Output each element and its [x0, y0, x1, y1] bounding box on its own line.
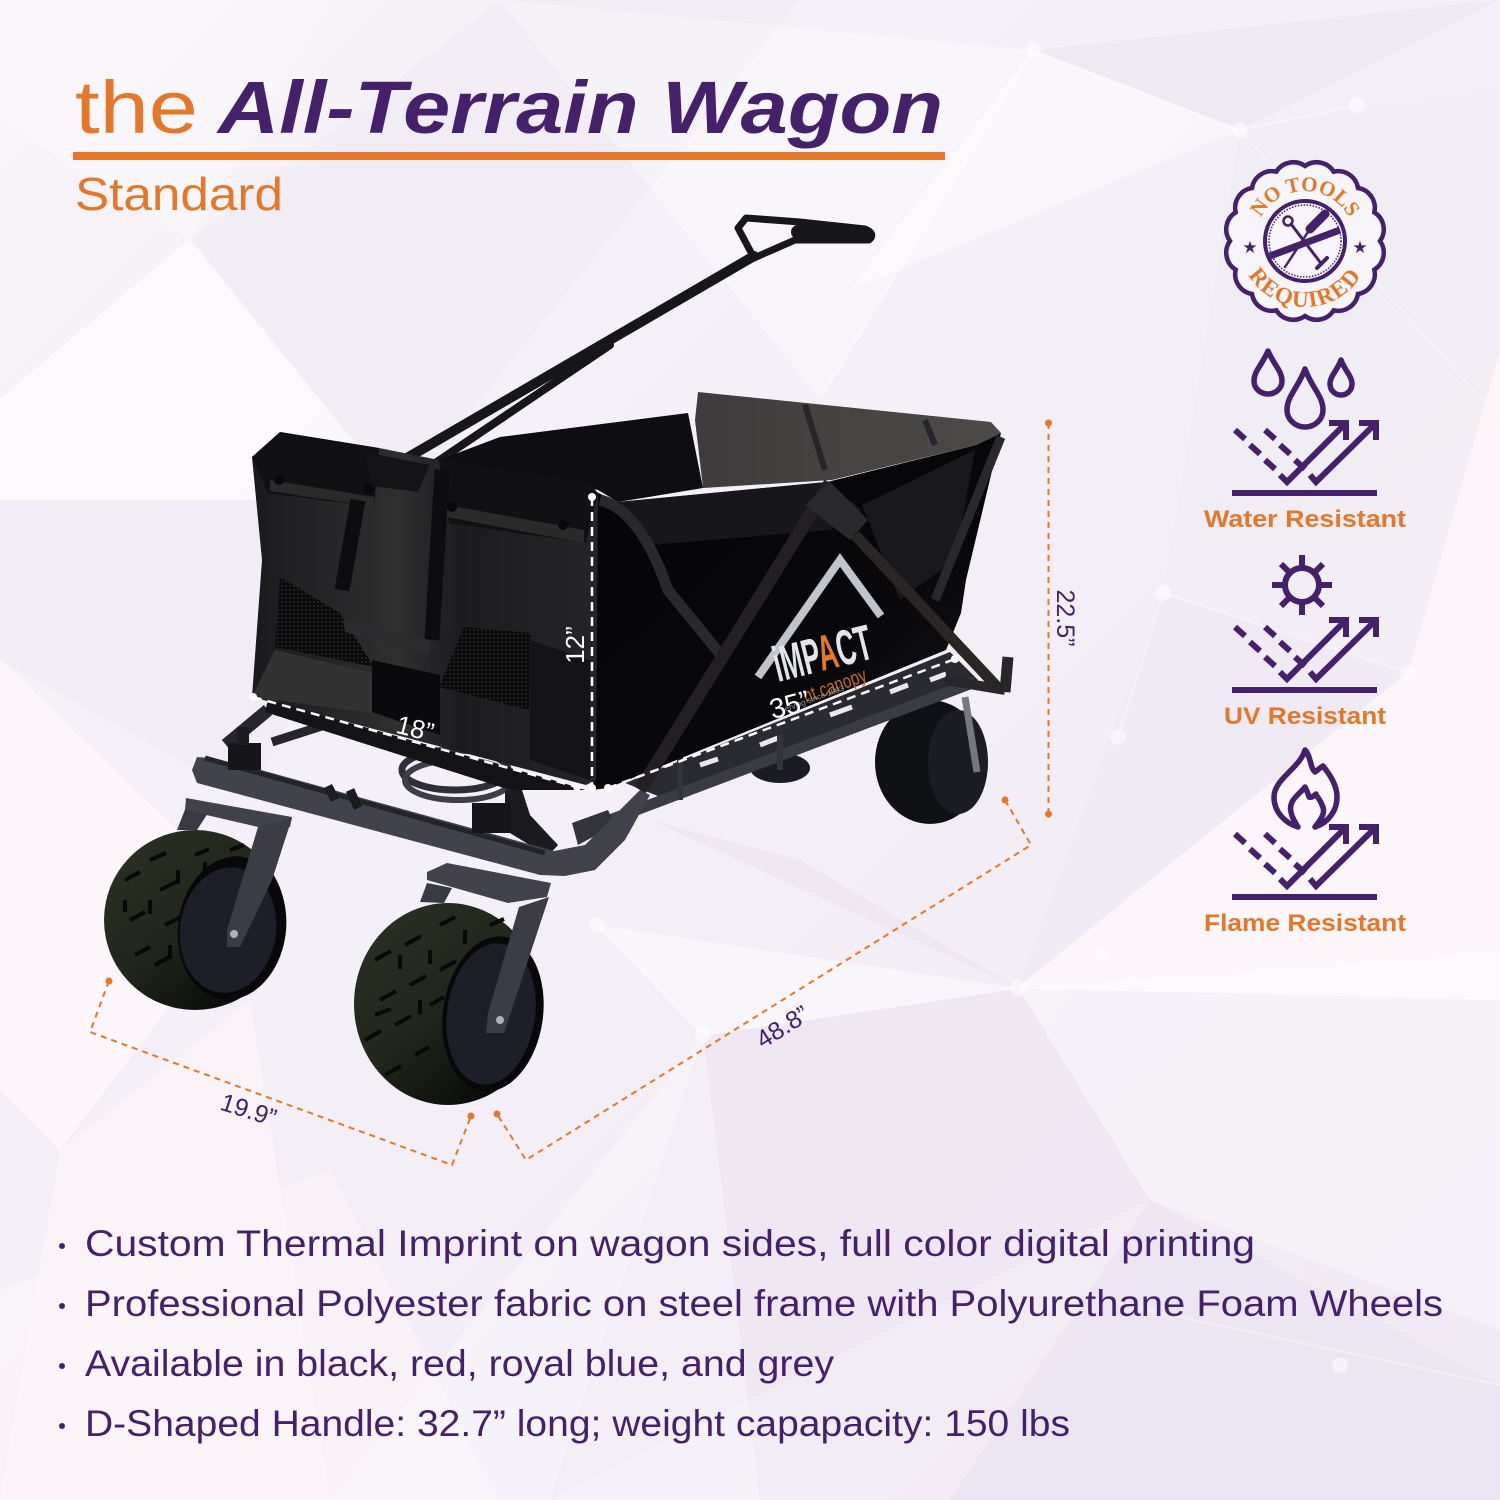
- badge: no tools required: ★: [1242, 238, 1258, 257]
- dimension: 22.5 inch height: 22.5”: [1051, 590, 1079, 646]
- dimension: 35 inch: 35”: [766, 685, 813, 725]
- wagon: right front wheel: [354, 863, 553, 1105]
- dimension: 12 inch: 12”: [560, 626, 590, 664]
- dimension: 19.9 inch width: 19.9”: [217, 1088, 280, 1133]
- wagon: under-bed frame: [226, 652, 1008, 856]
- feature list: Custom Thermal Imprint on wagon sides, full color digital printing: [85, 1223, 1255, 1264]
- title: [73, 66, 945, 160]
- feature list: D-Shaped Handle: 32.7” long; weight capapacity: 150 lbs: [85, 1403, 1070, 1444]
- wagon: interior: [439, 413, 703, 502]
- dimension: 12 inch: [560, 493, 596, 792]
- feature list: Available in black, red, royal blue, and grey: [85, 1343, 835, 1384]
- icon: crossed wrench and screwdriver: [1270, 214, 1340, 268]
- title: All-Terrain Wagon: [216, 66, 943, 149]
- label: flame resistant: Flame Resistant: [1204, 910, 1406, 937]
- dimension: 35 inch: [604, 655, 959, 792]
- title: the: [75, 66, 198, 149]
- wagon: main steel frame: [192, 727, 650, 876]
- wagon: front face fabric: [252, 432, 598, 785]
- label: uv resistant: UV Resistant: [1224, 703, 1386, 730]
- badge: no tools required: ★: [1352, 238, 1368, 257]
- wagon illustration: [104, 218, 1008, 1105]
- dimension: 22.5 inch height: [1045, 420, 1079, 818]
- icon: uv resistant: [1232, 555, 1377, 690]
- wagon: right side panel: [592, 433, 1001, 790]
- badge: no tools required: REQUIRED: [1248, 266, 1358, 308]
- label: water resistant: Water Resistant: [1204, 506, 1406, 533]
- feature list: Professional Polyester fabric on steel frame with Polyurethane Foam Wheels: [85, 1283, 1443, 1324]
- icon: flame resistant: [1232, 750, 1377, 897]
- wagon: far back wheel: [750, 697, 988, 824]
- badge: no tools required: NO TOOLS: [1250, 177, 1360, 218]
- wagon: handle: [395, 218, 872, 470]
- wagon: impact logo: [758, 560, 881, 715]
- wagon: impact logo: serving since 1993: [780, 683, 846, 715]
- wagon: panel highlights: [600, 405, 1001, 790]
- wagon: impact logo: iMPACT: [767, 614, 878, 693]
- wagon: impact logo: nt canopy: [800, 664, 870, 708]
- dimension: 48.8 inch length: 48.8”: [751, 1000, 814, 1054]
- wagon: grey back panel: [695, 392, 1001, 488]
- subtitle: Standard: [75, 168, 283, 220]
- dimension: 18 inch: 18”: [393, 709, 437, 747]
- dimension: 19.9 inch width: [90, 978, 474, 1165]
- badge: no tools required: [1224, 160, 1386, 322]
- dimension: 18 inch: [249, 693, 581, 791]
- icon: water resistant: [1232, 351, 1377, 493]
- wagon: left front wheel: [104, 798, 295, 1010]
- feature list: [59, 1223, 1443, 1444]
- dimension: 48.8 inch length: [494, 796, 1031, 1160]
- wagon: front flaps, straps and mesh pockets: [252, 432, 598, 790]
